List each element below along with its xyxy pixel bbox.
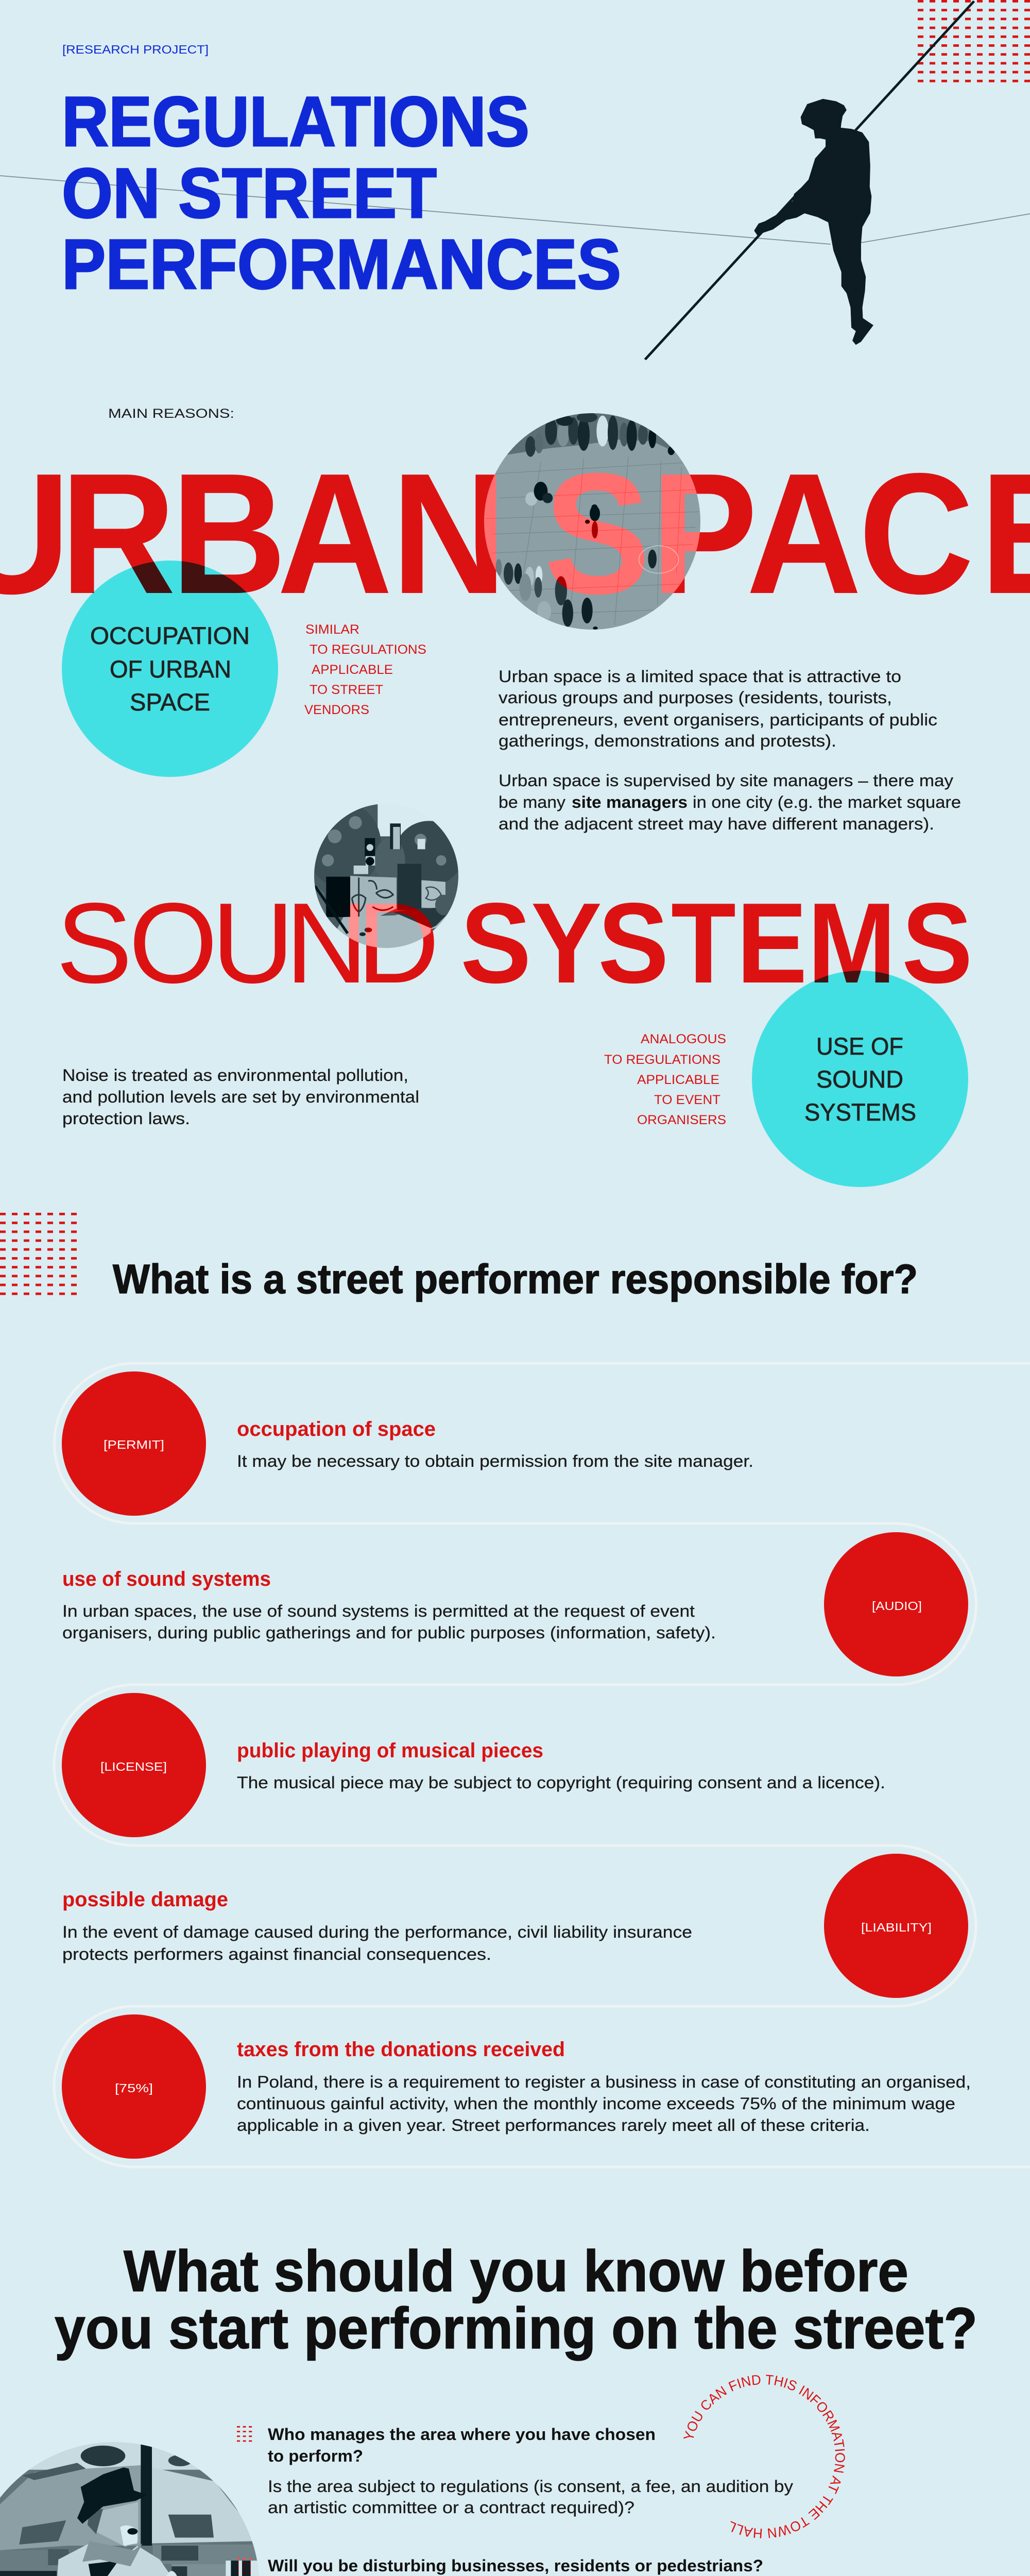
title: PERFORMANCES	[62, 225, 621, 304]
big heading: sound systems: SOUND	[56, 879, 439, 1007]
text block: urban space explanation: entrepreneurs, event organisers, participants of public	[499, 710, 937, 729]
item: taxes from the donations received: applicable in a given year. Street performances rarely meet all of these criteria.	[237, 2116, 870, 2134]
photo: mime in top hat	[0, 2435, 268, 2576]
text block: urban space explanation: various groups and purposes (residents, tourists,	[499, 688, 892, 707]
text block: urban space explanation: gatherings, demonstrations and protests).	[499, 732, 836, 750]
item: possible damage: In the event of damage caused during the performance, civil liability insurance	[62, 1923, 692, 1941]
title: ON STREET	[62, 154, 437, 233]
question block: who manages: to perform?	[268, 2447, 363, 2465]
text block: urban space explanation: site managers	[572, 793, 688, 811]
callout: similar to regulations applicable to street vendors: APPLICABLE	[312, 663, 393, 677]
circle badge: use of sound systems: SOUND	[816, 1065, 903, 1093]
bullets: tiny dotted markers	[237, 2426, 252, 2576]
text block: urban space explanation: Urban space is a limited space that is attractive to	[499, 667, 901, 686]
item: possible damage: protects performers against financial consequences.	[62, 1945, 491, 1963]
item: occupation of space	[62, 1371, 753, 1516]
callout: similar to regulations applicable to street vendors: TO REGULATIONS	[310, 642, 426, 657]
item: possible damage	[62, 1854, 968, 1998]
item: taxes from the donations received: taxes from the donations received	[237, 2038, 565, 2061]
question block: who manages: an artistic committee or a contract required)?	[268, 2498, 634, 2517]
text block: urban space explanation: in one city (e.g. the market square	[693, 793, 961, 811]
callout: similar to regulations applicable to street vendors	[304, 622, 426, 717]
circle badge: use of sound systems: USE OF	[816, 1032, 903, 1060]
callout: similar to regulations applicable to street vendors: VENDORS	[304, 703, 369, 717]
item: public playing of musical pieces: The musical piece may be subject to copyright (requiring consent and a licence).	[237, 1773, 885, 1792]
item: public playing of musical pieces	[62, 1693, 885, 1837]
question block: who manages	[268, 2425, 793, 2517]
callout: similar to regulations applicable to street vendors: SIMILAR	[305, 622, 359, 637]
item: taxes from the donations received	[62, 2014, 971, 2159]
callout: analogous to regulations applicable to event organisers: ANALOGOUS	[641, 1032, 726, 1046]
heading: what should you know	[55, 2239, 977, 2361]
callout: analogous to regulations applicable to event organisers	[604, 1032, 726, 1127]
circle badge: occupation of urban space: OF URBAN	[110, 655, 231, 683]
item: use of sound systems: use of sound systems	[62, 1568, 271, 1590]
text block: noise: protection laws.	[62, 1109, 190, 1128]
photo: overhead view of performer in a square	[480, 409, 704, 635]
big heading: sound systems	[56, 879, 973, 1007]
question block: who manages: Who manages the area where you have chosen	[268, 2425, 656, 2444]
item: possible damage: [LIABILITY]	[861, 1921, 932, 1934]
item: taxes from the donations received: [75%]	[115, 2081, 153, 2095]
callout: analogous to regulations applicable to event organisers: ORGANISERS	[637, 1113, 726, 1127]
text block: urban space explanation: and the adjacent street may have different managers).	[499, 815, 934, 833]
curved text: you can find this information at the town hall: YOU CAN FIND THIS INFORMATION AT THE TOWN HALL	[683, 2375, 845, 2538]
item: use of sound systems: organisers, during public gatherings and for public purposes (information, safety).	[62, 1623, 716, 1642]
project tag: [RESEARCH PROJECT]	[62, 43, 209, 56]
snake connector line	[54, 1363, 1030, 2167]
callout: analogous to regulations applicable to event organisers: TO EVENT	[654, 1093, 720, 1107]
circle badge: use of sound systems	[752, 971, 968, 1187]
title: REGULATIONS	[62, 82, 529, 161]
text block: urban space explanation	[499, 667, 961, 833]
heading: what should you know: you start performing on the street?	[55, 2296, 977, 2361]
big heading: sound systems: SYSTEMS	[460, 879, 973, 1007]
item: occupation of space: occupation of space	[237, 1418, 436, 1440]
callout: analogous to regulations applicable to event organisers: APPLICABLE	[637, 1073, 719, 1087]
circle badge: occupation of urban space	[62, 561, 278, 777]
item: taxes from the donations received: In Poland, there is a requirement to register a business in case of constituting an organised,	[237, 2073, 971, 2091]
question block: who manages: Is the area subject to regulations (is consent, a fee, an audition by	[268, 2477, 793, 2496]
illustration: tightrope walker silhouette with pole	[645, 1, 974, 360]
dotted pattern: left of section heading	[0, 1213, 77, 1295]
circle badge: use of sound systems: SYSTEMS	[804, 1098, 916, 1126]
callout: similar to regulations applicable to street vendors: TO STREET	[310, 683, 383, 697]
callout: analogous to regulations applicable to event organisers: TO REGULATIONS	[604, 1053, 720, 1067]
label: main reasons: MAIN REASONS:	[108, 406, 234, 421]
item: use of sound systems: In urban spaces, the use of sound systems is permitted at the request of event	[62, 1602, 695, 1620]
item: public playing of musical pieces: public playing of musical pieces	[237, 1739, 543, 1762]
item: occupation of space: It may be necessary to obtain permission from the site manager.	[237, 1452, 753, 1470]
photo: street stage with speakers	[314, 804, 458, 948]
item: taxes from the donations received: continuous gainful activity, when the monthly income exceeds 75% of the minimum wage	[237, 2094, 955, 2113]
item: use of sound systems: [AUDIO]	[872, 1599, 922, 1613]
text block: noise: Noise is treated as environmental pollution,	[62, 1066, 408, 1084]
circle badge: occupation of urban space: OCCUPATION	[90, 622, 250, 649]
heading: what should you know: What should you know before	[124, 2239, 908, 2303]
text block: noise: and pollution levels are set by environmental	[62, 1088, 419, 1106]
text block: noise	[62, 1066, 419, 1128]
item: public playing of musical pieces: [LICENSE]	[100, 1760, 167, 1773]
text block: urban space explanation: be many	[499, 793, 565, 811]
title	[62, 82, 621, 304]
tightrope wire	[0, 176, 1030, 244]
dotted pattern: top right	[918, 0, 1030, 83]
circle badge: occupation of urban space: SPACE	[130, 688, 210, 716]
item: possible damage: possible damage	[62, 1888, 228, 1911]
item: use of sound systems	[62, 1532, 968, 1676]
item: occupation of space: [PERMIT]	[104, 1438, 164, 1451]
text block: urban space explanation: Urban space is supervised by site managers – there may	[499, 771, 953, 790]
heading: what is a street performer responsible for: What is a street performer responsible for?	[113, 1256, 918, 1302]
question block: will you be disturbing: Will you be disturbing businesses, residents or pedestrians?	[268, 2556, 763, 2575]
